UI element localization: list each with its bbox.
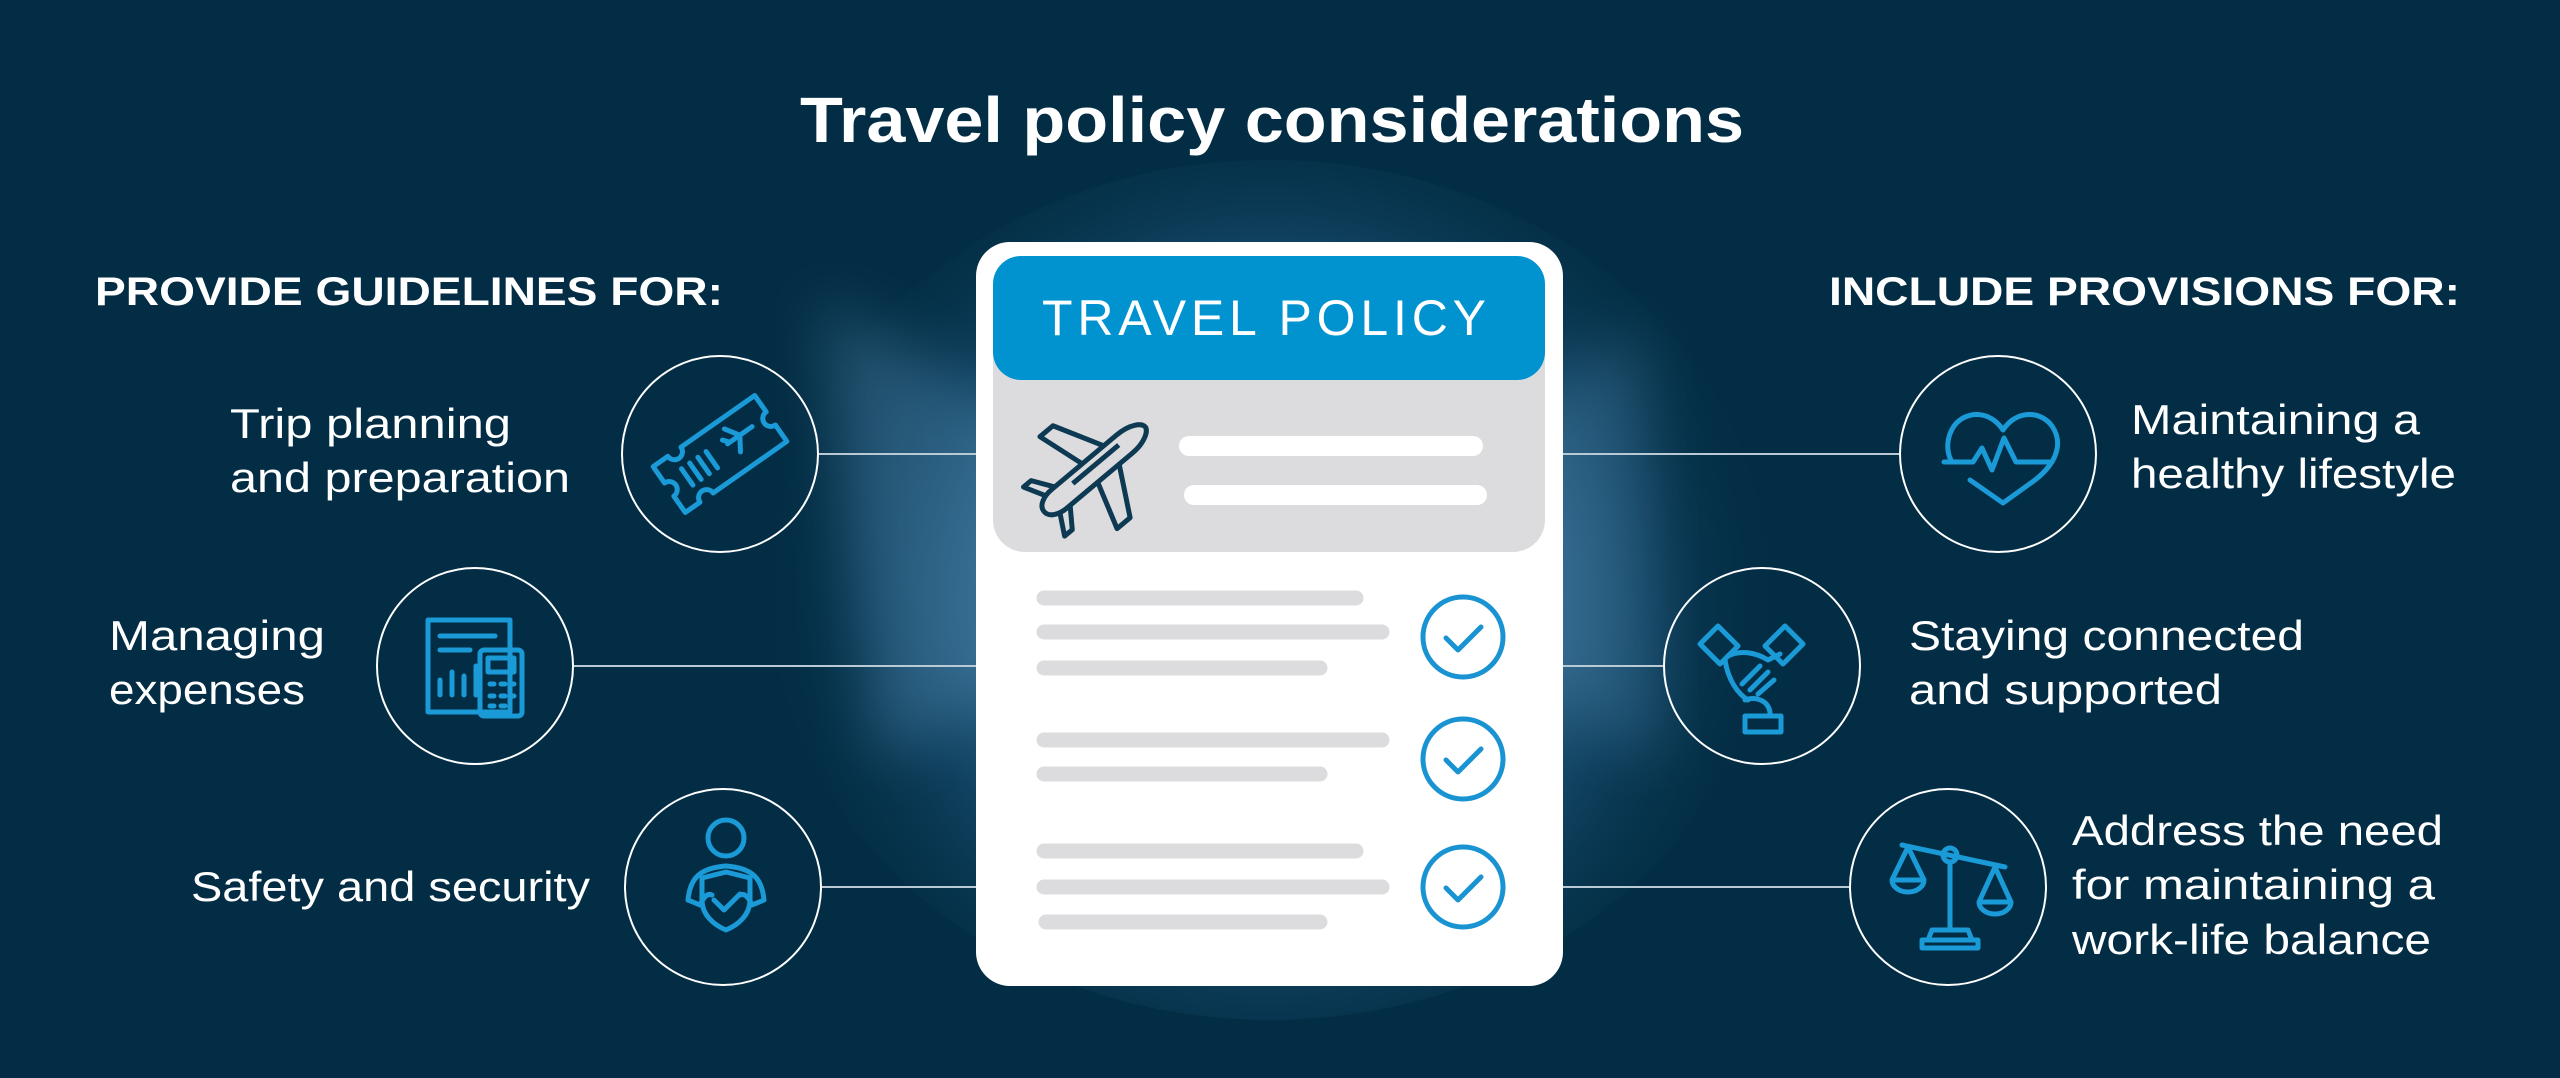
text: Staying connected xyxy=(1909,612,2304,659)
item: staying connected xyxy=(1664,568,2304,764)
item: managing expenses xyxy=(109,568,573,764)
connector lines xyxy=(573,454,1900,887)
gray header band xyxy=(993,300,1545,552)
check circles xyxy=(1423,597,1503,927)
text: Safety and security xyxy=(191,863,590,910)
item: work-life balance xyxy=(1850,789,2443,985)
text: for maintaining a xyxy=(2072,861,2436,908)
text: work-life balance xyxy=(2071,916,2431,963)
text: Managing xyxy=(109,612,325,659)
blue header: TRAVEL POLICY xyxy=(993,256,1545,380)
text: Trip planning xyxy=(230,400,511,447)
blue header: TRAVEL POLICY: TRAVEL POLICY xyxy=(1042,290,1486,346)
item: safety and security xyxy=(191,789,821,985)
text: and supported xyxy=(1909,666,2222,713)
text: Maintaining a xyxy=(2131,396,2421,443)
policy document card xyxy=(976,242,1563,986)
text: expenses xyxy=(109,666,305,713)
background glow xyxy=(770,160,1770,1020)
heading: provide guidelines: PROVIDE GUIDELINES FOR: xyxy=(95,270,723,314)
white lines xyxy=(1189,446,1477,495)
checklist lines xyxy=(1044,598,1382,922)
item: healthy lifestyle xyxy=(1900,356,2456,552)
text: and preparation xyxy=(230,454,570,501)
icon: airplane xyxy=(1005,381,1184,558)
text: Address the need xyxy=(2072,807,2443,854)
title: Travel policy considerations xyxy=(800,84,1744,156)
heading: include provisions: INCLUDE PROVISIONS FOR: xyxy=(1829,270,2460,314)
item: trip planning xyxy=(230,356,818,552)
text: healthy lifestyle xyxy=(2131,450,2456,497)
